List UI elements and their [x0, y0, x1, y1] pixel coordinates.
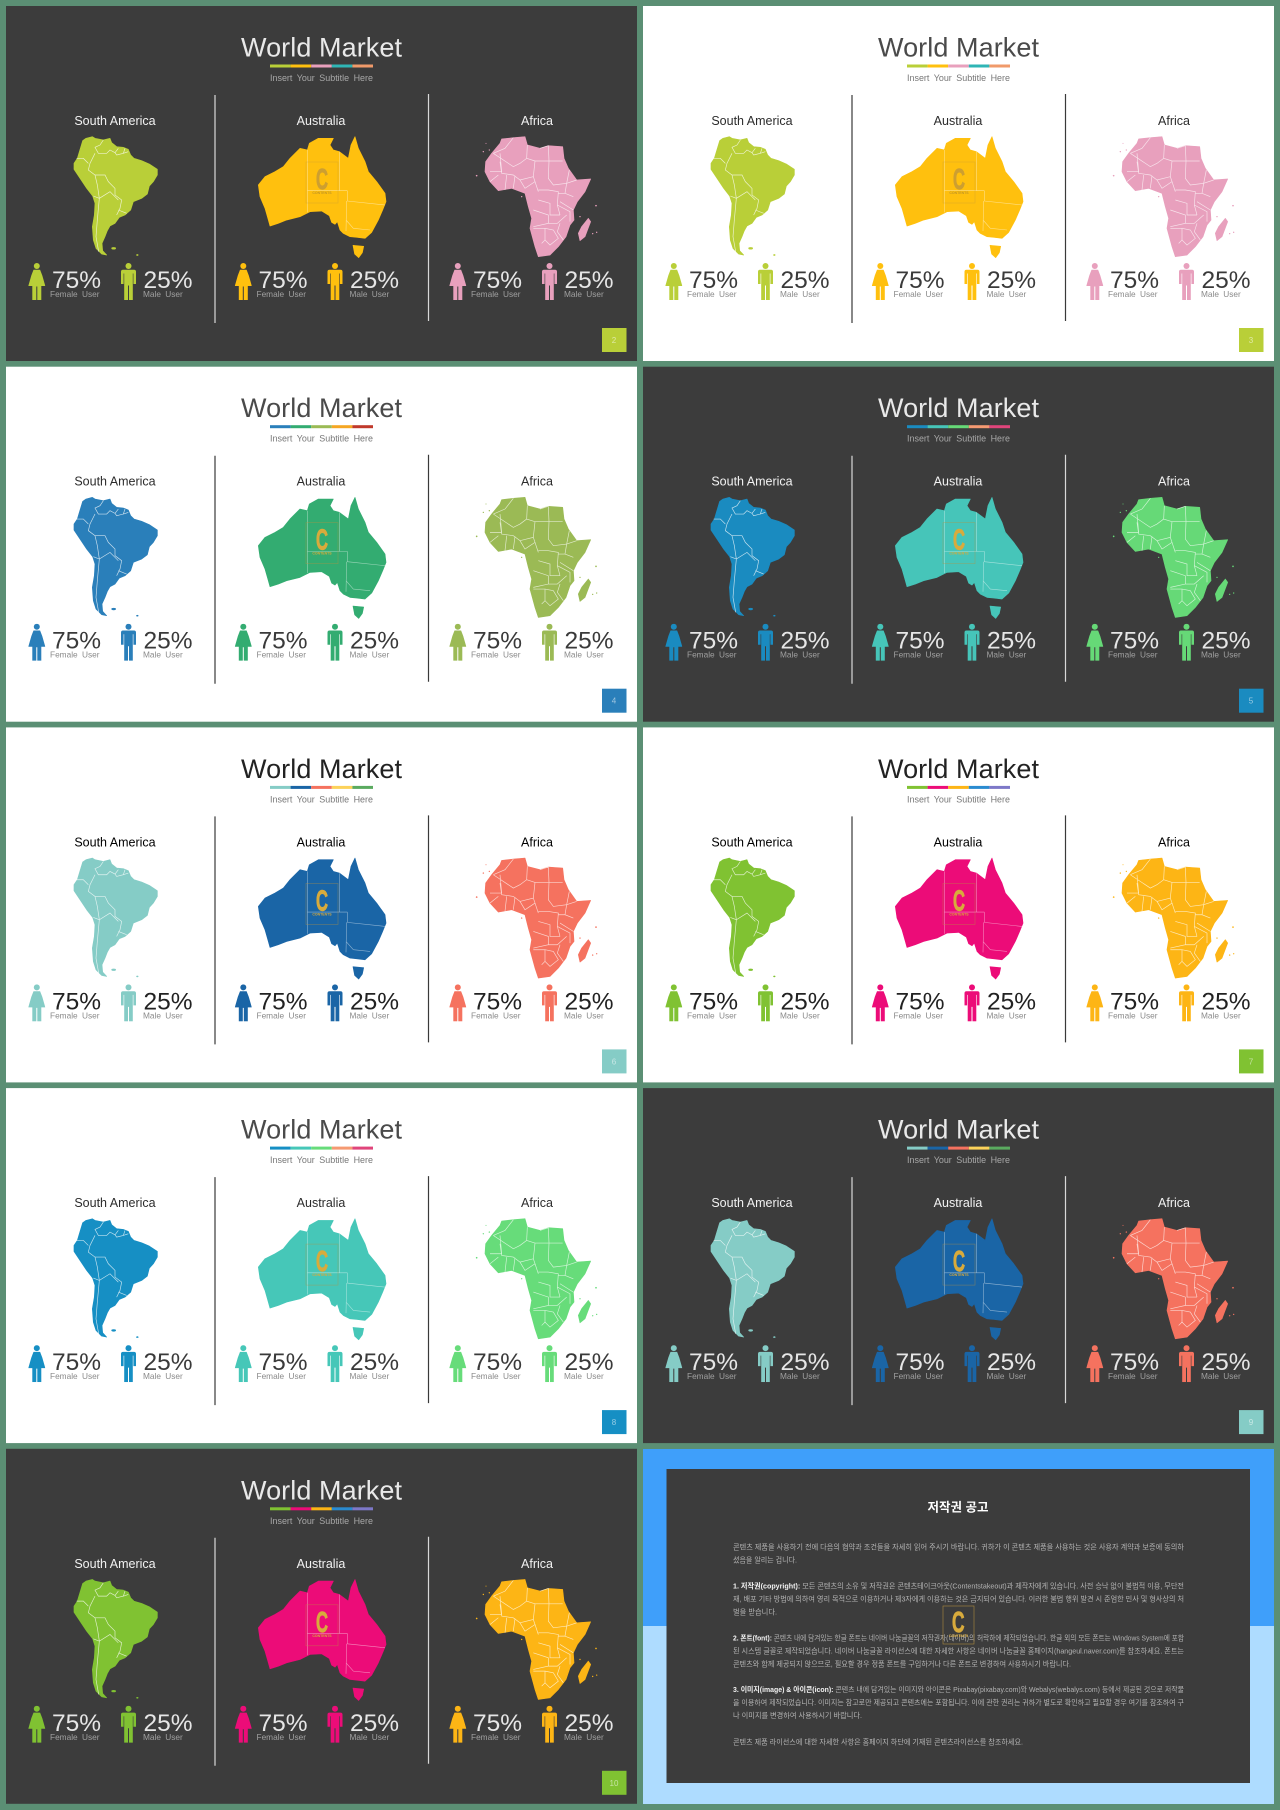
map: Africa — [1113, 1219, 1234, 1339]
stats: Australia: Female User — [894, 1010, 943, 1020]
stats: South America: 25% — [144, 1349, 193, 1376]
watermark logo: CONTENTS — [949, 552, 969, 556]
stats: Africa: 75% — [473, 628, 522, 655]
stats: Africa: 75% — [1110, 267, 1159, 294]
stats: South America: Female User — [687, 650, 737, 660]
watermark logo — [943, 523, 975, 564]
subtitle: Insert Your Subtitle Here — [907, 73, 1010, 83]
map: Australia — [258, 137, 386, 258]
title colour bar — [907, 64, 1010, 68]
stats: Africa: 25% — [564, 1710, 614, 1737]
title: World Market — [241, 1475, 402, 1505]
heading: Africa: Africa — [521, 475, 553, 489]
stats: Africa: Female User — [471, 1732, 521, 1742]
stats: Australia: 75% — [258, 267, 308, 294]
heading: Africa: Africa — [521, 835, 553, 849]
watermark logo — [943, 162, 975, 203]
stats: Australia — [872, 1345, 1036, 1382]
stats: South America: Female User — [687, 289, 737, 299]
stats: Africa — [1086, 624, 1251, 661]
page number: 6 — [612, 1057, 617, 1066]
stats: South America: 25% — [780, 988, 830, 1015]
heading: Africa: Africa — [1158, 1196, 1190, 1210]
title colour bar — [270, 1507, 373, 1510]
stats: Australia: Male User — [350, 1010, 390, 1020]
subtitle: Insert Your Subtitle Here — [907, 1155, 1010, 1165]
stats: South America: 25% — [780, 1349, 830, 1376]
map: Africa — [1113, 858, 1234, 978]
stats: South America: Male User — [780, 1371, 820, 1381]
watermark logo: CONTENTS — [949, 191, 969, 195]
stats: South America: 25% — [780, 267, 830, 294]
stats: Africa: Male User — [564, 1732, 604, 1742]
stats: Africa: 25% — [564, 988, 614, 1015]
stats: Africa: 75% — [473, 1710, 522, 1737]
stats: Australia: Female User — [894, 1371, 943, 1381]
stats: Australia — [235, 263, 399, 300]
stats: Africa: Male User — [564, 1010, 604, 1020]
title colour bar — [907, 786, 1010, 789]
page number — [602, 689, 626, 713]
heading: South America: South America — [74, 1196, 156, 1210]
map: Australia — [258, 858, 386, 979]
stats: South America: Male User — [143, 650, 183, 660]
map: Africa — [476, 137, 597, 257]
map: South America — [711, 497, 794, 617]
map: South America — [711, 137, 794, 256]
copyright body text: 벌을 받습니다. — [733, 1608, 777, 1616]
heading: Australia: Australia — [297, 835, 345, 849]
stats: South America: Male User — [780, 289, 820, 299]
slide 2: dark, lime yellow pink — [6, 6, 637, 361]
page number: 3 — [1249, 336, 1254, 345]
watermark logo: C — [316, 1607, 328, 1639]
map: South America — [711, 858, 794, 977]
stats: Australia: Male User — [350, 1371, 390, 1381]
stats: South America: Male User — [143, 1010, 183, 1020]
watermark logo: C — [316, 1246, 328, 1278]
slide 4: white, blue green olive — [6, 367, 637, 722]
stats: Africa: 25% — [1202, 267, 1251, 294]
stats: Australia — [872, 624, 1036, 661]
stats: Africa: Male User — [564, 650, 604, 660]
stats: South America — [28, 1345, 193, 1382]
stats: Australia: 25% — [987, 988, 1036, 1015]
map: Africa — [476, 497, 597, 617]
stats: South America: 75% — [52, 1710, 101, 1737]
map: South America — [74, 137, 157, 256]
watermark logo: CONTENTS — [949, 1273, 969, 1277]
stats: Australia: 25% — [987, 1349, 1036, 1376]
stats: Africa: 25% — [564, 1349, 614, 1376]
stats: Australia: Female User — [256, 1371, 306, 1381]
stats: South America: 75% — [689, 267, 738, 294]
stats: Australia — [235, 1706, 399, 1743]
subtitle: Insert Your Subtitle Here — [907, 434, 1010, 444]
stats: South America: Male User — [143, 1732, 183, 1742]
stats: South America: 25% — [780, 628, 830, 655]
heading: Australia: Australia — [934, 835, 982, 849]
stats: Australia: 25% — [350, 988, 399, 1015]
stats: Africa: Male User — [1201, 289, 1241, 299]
slide 9: dark, pale teal navy coral — [643, 1088, 1274, 1443]
heading: Australia: Australia — [297, 114, 345, 128]
stats: South America: 25% — [144, 1710, 193, 1737]
heading: Africa: Africa — [1158, 835, 1190, 849]
heading: South America: South America — [711, 475, 793, 489]
page number — [602, 1049, 626, 1073]
stats: Africa: Male User — [1201, 1371, 1241, 1381]
title colour bar — [907, 425, 1010, 428]
heading: South America: South America — [74, 114, 156, 128]
page number — [602, 1410, 626, 1434]
title colour bar — [270, 1147, 373, 1150]
stats: Australia: Male User — [350, 1732, 390, 1742]
watermark logo: C — [953, 1246, 965, 1278]
watermark logo — [306, 1605, 338, 1646]
page number — [1239, 1410, 1264, 1434]
stats: Africa: Male User — [1201, 650, 1241, 660]
copyright body text: 1. 저작권(copyright): 모든 콘텐츠의 소유 및 저작권은 콘텐츠테이크아웃(Contentstakeout)과 제작자에게 있습니다. 사전 승낙 없이 불법적 이용, 무단전 — [733, 1582, 1184, 1590]
slide 7: white, green magenta amber — [643, 727, 1274, 1082]
copyright body text: 을 이용하여 제작되었습니다. 이미지는 참고로만 제공되고 콘텐츠에는 포함됩니다. 이에 관한 권리는 귀하가 별도로 확인하고 필요할 경우 여기를 참조하여 구 — [733, 1698, 1184, 1707]
heading: Africa: Africa — [521, 1196, 553, 1210]
page number — [1239, 328, 1264, 352]
page number: 9 — [1249, 1418, 1254, 1427]
stats: Africa: 75% — [473, 1349, 522, 1376]
copyright body text: 콘텐츠 제품 라이선스에 대한 자세한 사항은 홈페이지 하단에 기재된 콘텐츠라이선스를 참조하세요. — [733, 1738, 1023, 1746]
stats: Australia: Female User — [256, 1010, 306, 1020]
stats: South America: Female User — [687, 1010, 737, 1020]
stats: Australia: 25% — [350, 1349, 399, 1376]
copyright body text: 3. 이미지(image) & 아이콘(icon): 콘텐츠 내에 담겨있는 이미지와 아이콘은 Pixabay(pixabay.com)와 Webalys(webalys.com) 등에서 제공된 것으로 저작물 — [733, 1685, 1184, 1694]
title: World Market — [878, 393, 1039, 423]
stats: Africa: 25% — [1202, 628, 1251, 655]
heading: Africa: Africa — [521, 114, 553, 128]
stats: South America — [665, 624, 830, 661]
stats: Africa: Female User — [1108, 1371, 1158, 1381]
stats: South America: Female User — [50, 650, 100, 660]
subtitle: Insert Your Subtitle Here — [270, 1516, 373, 1526]
stats: Australia — [235, 984, 399, 1021]
map: South America — [74, 1579, 157, 1699]
stats: South America: 75% — [52, 628, 101, 655]
copyright body text: 셨음을 알리는 겁니다. — [733, 1556, 797, 1564]
title: World Market — [241, 754, 402, 784]
watermark logo: CONTENTS — [949, 912, 969, 916]
watermark logo: CONTENTS — [312, 191, 332, 195]
page number — [1239, 689, 1264, 713]
page number: 7 — [1249, 1057, 1254, 1066]
title: World Market — [878, 754, 1039, 784]
subtitle: Insert Your Subtitle Here — [270, 794, 373, 804]
watermark logo — [943, 1606, 974, 1644]
stats: Australia: Female User — [894, 289, 943, 299]
stats: South America — [28, 984, 193, 1021]
page number: 8 — [612, 1418, 617, 1427]
page number — [602, 328, 626, 352]
heading: South America: South America — [74, 835, 156, 849]
title: World Market — [241, 32, 402, 62]
map: Australia — [258, 497, 386, 618]
map: Australia — [895, 858, 1023, 979]
stats: South America — [665, 1345, 830, 1382]
watermark logo: C — [953, 885, 965, 917]
copyright body text: 콘텐츠와 함께 제공되지 않으므로, 필요할 경우 정품 폰트를 구입하거나 다른 폰트로 변경하여 사용하시기 바랍니다. — [733, 1660, 1071, 1668]
stats: Australia: 25% — [350, 267, 399, 294]
stats: Africa — [449, 984, 614, 1021]
stats: South America: Male User — [780, 1010, 820, 1020]
stats: South America — [28, 263, 193, 300]
panel: copyright notice slide — [643, 1449, 1274, 1804]
stats: Africa: Female User — [471, 1010, 521, 1020]
stats: Africa: Female User — [1108, 650, 1158, 660]
stats: South America: Female User — [50, 289, 100, 299]
stats: Australia: Female User — [256, 289, 306, 299]
stats: Africa: Female User — [1108, 1010, 1158, 1020]
heading: Africa: Africa — [521, 1557, 553, 1571]
map: Australia — [258, 1579, 386, 1700]
copyright body text — [733, 1542, 1184, 1746]
watermark logo — [306, 1244, 338, 1285]
stats: Africa: 75% — [1110, 1349, 1159, 1376]
stats: Australia: 75% — [896, 628, 945, 655]
stats: Africa: 75% — [473, 988, 522, 1015]
watermark logo: C — [316, 164, 328, 196]
stats: South America — [665, 984, 830, 1021]
map: Australia — [895, 497, 1023, 618]
map: Africa — [476, 858, 597, 978]
stats: Africa — [449, 263, 614, 300]
stats: Australia: 75% — [896, 988, 945, 1015]
heading: Africa: Africa — [1158, 114, 1190, 128]
stats: Australia: 25% — [987, 267, 1036, 294]
stats: Australia: 75% — [896, 1349, 945, 1376]
stats: Africa: Male User — [564, 289, 604, 299]
map: Australia — [258, 1219, 386, 1340]
heading: Australia: Australia — [934, 475, 982, 489]
stats: South America: 75% — [52, 267, 101, 294]
map: Africa — [476, 1219, 597, 1339]
page number: 2 — [612, 336, 617, 345]
heading: Australia: Australia — [934, 1196, 982, 1210]
subtitle: Insert Your Subtitle Here — [270, 434, 373, 444]
heading: Australia: Australia — [297, 475, 345, 489]
title: World Market — [241, 393, 402, 423]
stats: Australia — [235, 1345, 399, 1382]
stats: South America: Female User — [50, 1010, 100, 1020]
stats: South America: Male User — [780, 650, 820, 660]
heading: South America: South America — [711, 1196, 793, 1210]
watermark logo: CONTENTS — [312, 1273, 332, 1277]
map: South America — [74, 858, 157, 977]
stats: Africa: 25% — [1202, 988, 1251, 1015]
slide 10: dark, green magenta amber — [6, 1449, 637, 1804]
title colour bar — [270, 786, 373, 789]
stats: Africa: 75% — [1110, 628, 1159, 655]
page number — [602, 1771, 626, 1795]
stats: South America: Female User — [687, 1371, 737, 1381]
copyright heading: 저작권 공고 — [928, 1500, 988, 1514]
watermark logo: C — [953, 164, 965, 196]
copyright body text: 2. 폰트(font): 콘텐츠 내에 담겨있는 한글 폰트는 네이버 나눔글꼴의 저작권자(네이버)의 허락하에 제작되었습니다. 한글 외의 모든 폰트는 Windows System에 포함 — [733, 1634, 1184, 1642]
heading: South America: South America — [74, 1557, 156, 1571]
stats: South America: 75% — [689, 628, 738, 655]
subtitle: Insert Your Subtitle Here — [270, 73, 373, 83]
stats: Australia: Female User — [256, 650, 306, 660]
stats: South America: 25% — [144, 988, 193, 1015]
heading: South America: South America — [711, 835, 793, 849]
watermark logo: CONTENTS — [312, 912, 332, 916]
title: World Market — [241, 1115, 402, 1145]
map: Africa — [476, 1579, 597, 1699]
title colour bar — [907, 1147, 1010, 1150]
stats: Australia: 75% — [258, 1349, 308, 1376]
stats: Africa — [1086, 1345, 1251, 1382]
map: South America — [74, 1219, 157, 1338]
stats: Africa — [449, 1345, 614, 1382]
stats: Africa — [449, 1706, 614, 1743]
stats: Africa: Female User — [471, 289, 521, 299]
watermark logo — [306, 162, 338, 203]
page number: 10 — [610, 1779, 619, 1788]
stats: Australia: Male User — [986, 289, 1027, 299]
map: Africa — [1113, 137, 1234, 257]
stats: Australia: 75% — [258, 988, 308, 1015]
stats: Africa: 25% — [1202, 1349, 1251, 1376]
stats: South America: Female User — [50, 1371, 100, 1381]
stats: Africa — [1086, 984, 1251, 1021]
stats: Australia: 75% — [896, 267, 945, 294]
stats: Australia — [872, 984, 1036, 1021]
copyright body text: 콘텐츠 제품을 사용하기 전에 다음의 협약과 조건들을 자세히 읽어 주시기 바랍니다. 귀하가 이 콘텐츠 제품을 사용하는 것은 사용자 계약과 보증에 동의하 — [733, 1542, 1184, 1552]
stats: South America — [28, 624, 193, 661]
stats: Australia: Female User — [256, 1732, 306, 1742]
title: World Market — [878, 1115, 1039, 1145]
stats: Africa: Male User — [564, 1371, 604, 1381]
stats: Africa: Female User — [471, 1371, 521, 1381]
watermark logo: C — [316, 525, 328, 557]
stats: Australia: 25% — [987, 628, 1036, 655]
title colour bar — [270, 64, 373, 68]
stats: Africa: Female User — [1108, 289, 1158, 299]
page number — [1239, 1049, 1264, 1073]
watermark logo: CONTENTS — [949, 1634, 969, 1638]
stats: Africa: 75% — [473, 267, 522, 294]
stats: South America: 75% — [52, 988, 101, 1015]
stats: Australia: Male User — [986, 1010, 1027, 1020]
stats: South America: Male User — [143, 289, 183, 299]
stats: South America: 75% — [52, 1349, 101, 1376]
page number: 4 — [612, 697, 617, 706]
watermark logo: CONTENTS — [312, 1634, 332, 1638]
stats: Africa: Male User — [1201, 1010, 1241, 1020]
heading: South America: South America — [711, 114, 793, 128]
stats: South America — [665, 263, 830, 300]
copyright body text: 재, 배포 기타 방법에 의하여 영리 목적으로 이용하거나 제3자에게 이용하는 것은 금지되어 있습니다. 이러한 불법 행위 발견 시 준엄한 민사 및 형사상의 처 — [733, 1594, 1184, 1604]
stats: Australia: Female User — [894, 650, 943, 660]
title: World Market — [878, 32, 1039, 62]
subtitle: Insert Your Subtitle Here — [907, 794, 1010, 804]
stats: Australia: 25% — [350, 1710, 399, 1737]
stats: Australia: 75% — [258, 628, 308, 655]
watermark logo: C — [316, 885, 328, 917]
page number: 5 — [1249, 697, 1254, 706]
heading: Australia: Australia — [297, 1557, 345, 1571]
stats: Australia: Male User — [986, 1371, 1027, 1381]
stats: South America: 25% — [144, 267, 193, 294]
watermark logo — [306, 523, 338, 564]
copyright body text: 나 이미지를 변경하여 사용하시기 바랍니다. — [733, 1711, 862, 1720]
stats: Australia: 75% — [258, 1710, 308, 1737]
stats: South America: Female User — [50, 1732, 100, 1742]
copyright body text: 된 시스템 글꼴로 제작되었습니다. 네이버 나눔글꼴 라이선스에 대한 자세한 사항은 네이버 나눔글꼴 홈페이지(hangeul.naver.com)를 참조하세요. 폰트는 — [733, 1646, 1184, 1656]
stats: South America: 25% — [144, 628, 193, 655]
heading: South America: South America — [74, 475, 156, 489]
stats: Africa: 75% — [1110, 988, 1159, 1015]
map: South America — [74, 497, 157, 617]
stats: Australia — [872, 263, 1036, 300]
stats: Australia — [235, 624, 399, 661]
map: South America — [711, 1219, 794, 1338]
title colour bar — [270, 425, 373, 428]
heading: Africa: Africa — [1158, 475, 1190, 489]
stats: Australia: Male User — [986, 650, 1027, 660]
subtitle: Insert Your Subtitle Here — [270, 1155, 373, 1165]
stats: South America: 75% — [689, 1349, 738, 1376]
map: Australia — [895, 137, 1023, 258]
slide 3: white, lime yellow pink — [643, 6, 1274, 361]
stats: Australia: 25% — [350, 628, 399, 655]
stats: South America: 75% — [689, 988, 738, 1015]
stats: Africa — [449, 624, 614, 661]
stats: South America: Male User — [143, 1371, 183, 1381]
dark inner panel — [666, 1469, 1250, 1783]
watermark logo — [943, 1244, 975, 1285]
watermark logo — [943, 883, 975, 924]
stats: Africa: 25% — [564, 628, 614, 655]
watermark logo — [306, 883, 338, 924]
map: Australia — [895, 1219, 1023, 1340]
stats: Australia: Male User — [350, 289, 390, 299]
stats: Australia: Male User — [350, 650, 390, 660]
slide 6: white, pale teal navy coral — [6, 727, 637, 1082]
two-tone blue background — [643, 1449, 1274, 1804]
watermark logo: CONTENTS — [312, 552, 332, 556]
stats: Africa: Female User — [471, 650, 521, 660]
stats: Africa — [1086, 263, 1251, 300]
slide 5: dark, blue teal green — [643, 367, 1274, 722]
watermark logo: C — [953, 525, 965, 557]
heading: Australia: Australia — [934, 114, 982, 128]
map: Africa — [1113, 497, 1234, 617]
stats: Africa: 25% — [564, 267, 614, 294]
slide 8: white, blue teal green — [6, 1088, 637, 1443]
heading: Australia: Australia — [297, 1196, 345, 1210]
watermark logo: C — [952, 1607, 965, 1639]
stats: South America — [28, 1706, 193, 1743]
